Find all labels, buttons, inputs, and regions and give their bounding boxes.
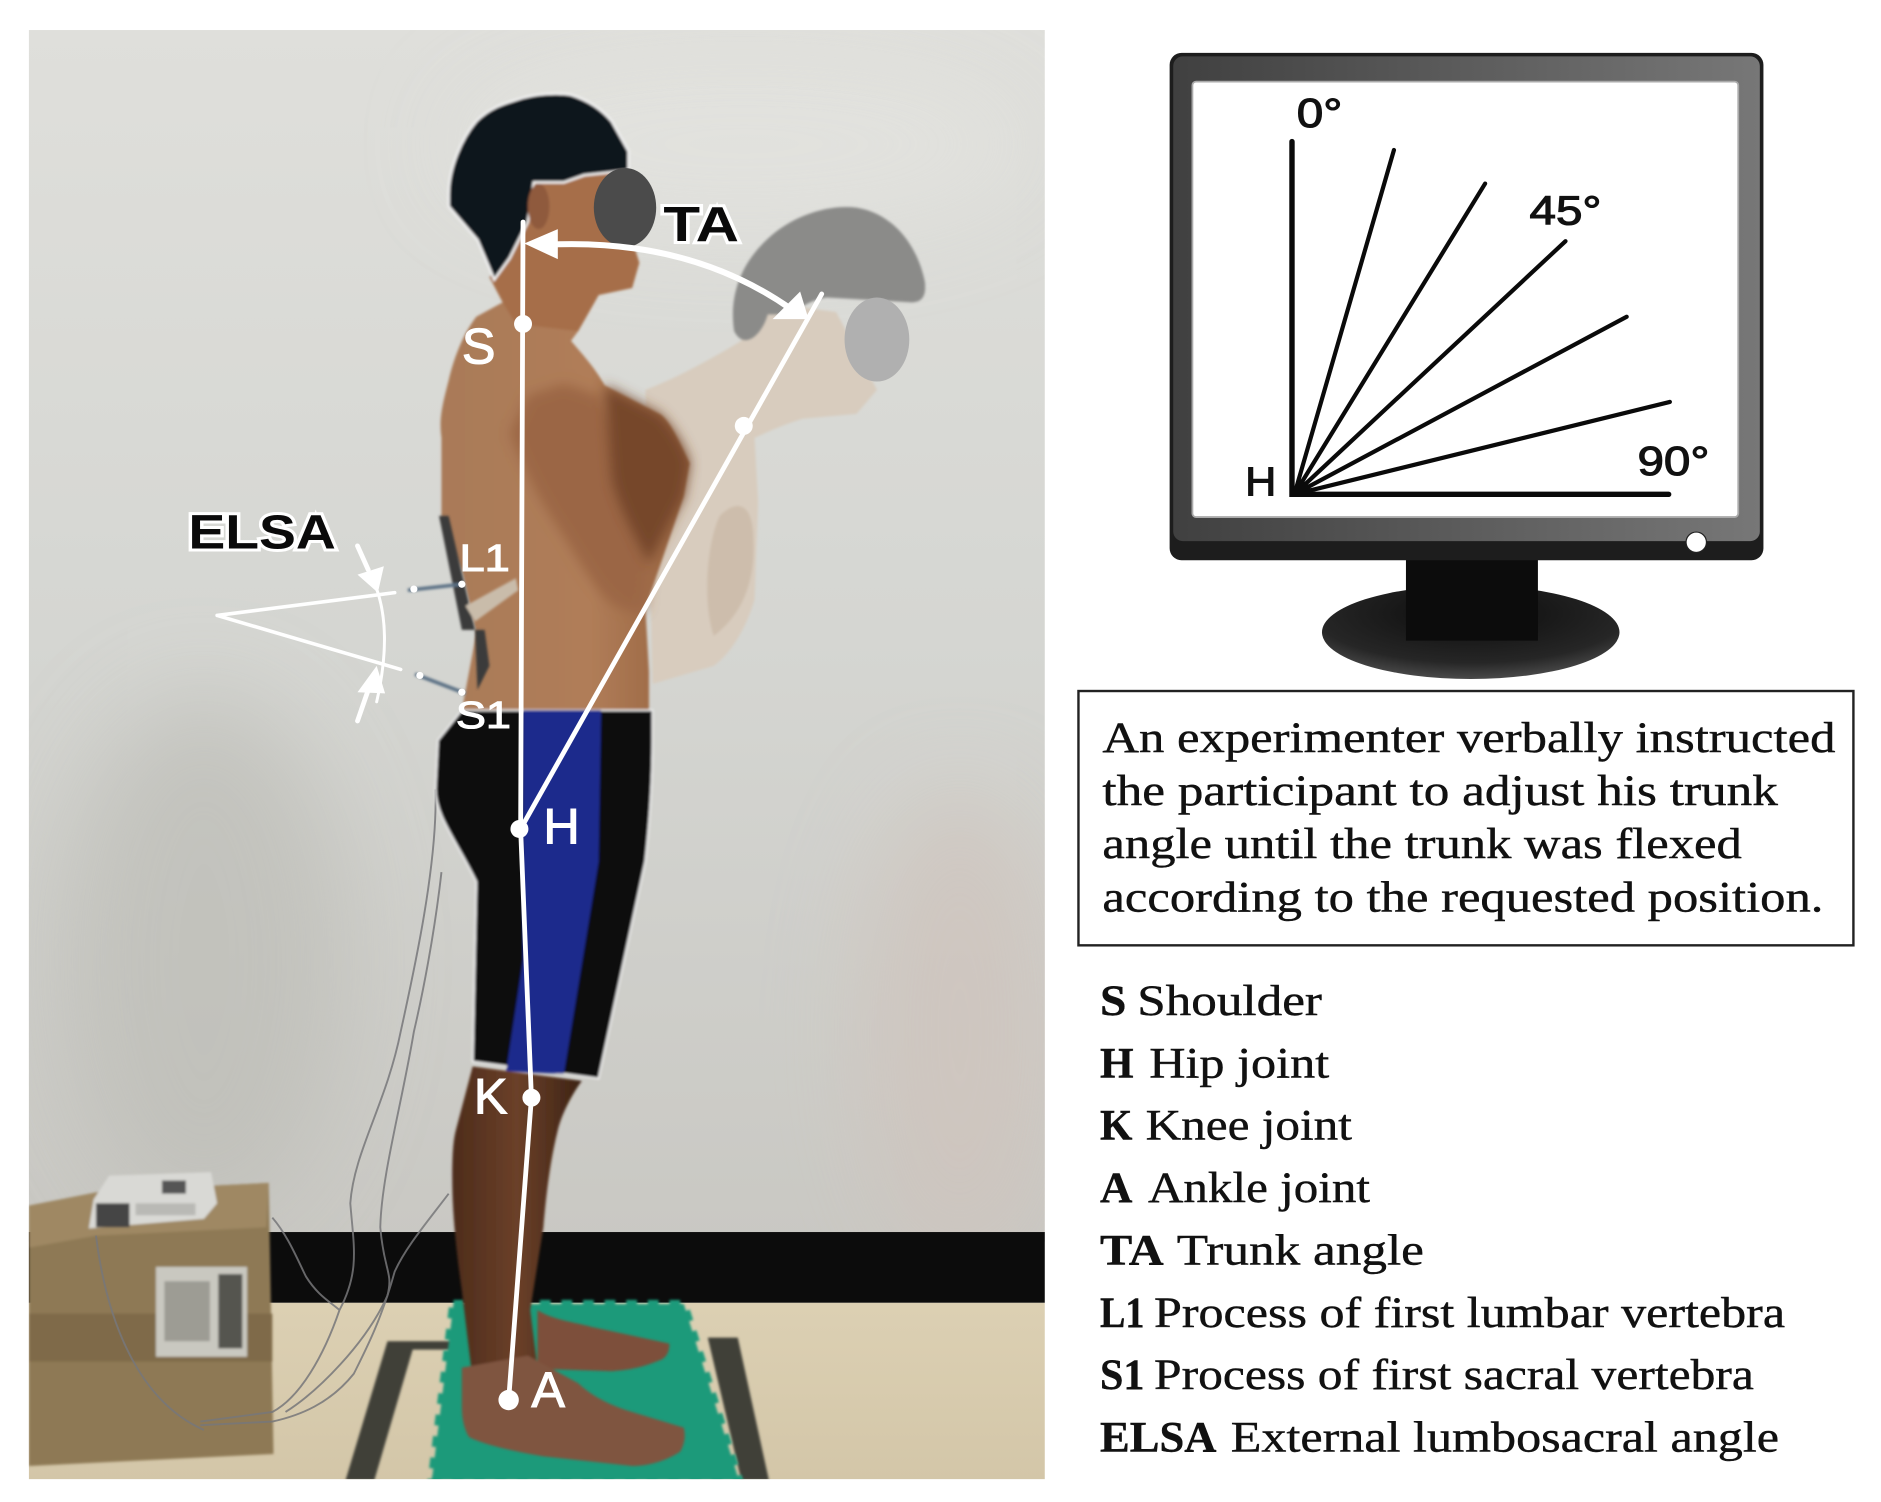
panel: photograph of participant — [29, 30, 1056, 1483]
hands — [605, 385, 690, 564]
legend of abbreviations: A — [1100, 1165, 1132, 1212]
cardboard box — [29, 1172, 274, 1466]
body segment lines — [509, 222, 822, 1400]
instruction text box: angle until the trunk was flexed — [1102, 821, 1742, 868]
label: K: K — [474, 1067, 508, 1124]
legs — [452, 1066, 582, 1410]
legend of abbreviations: Ankle joint — [1148, 1165, 1370, 1212]
legend of abbreviations: L1 — [1100, 1290, 1144, 1337]
floor rails — [345, 1338, 769, 1480]
label: S1: S1 — [456, 694, 511, 737]
label: ELSA: ELSA — [188, 506, 336, 559]
legend of abbreviations: Trunk angle — [1177, 1227, 1424, 1274]
legend of abbreviations: S — [1100, 978, 1126, 1025]
legend of abbreviations: External lumbosacral angle — [1231, 1415, 1779, 1462]
label: H: H — [1245, 458, 1276, 504]
angle lines chart — [1292, 142, 1670, 494]
blue stripe — [506, 710, 601, 1074]
monitor screen — [1192, 82, 1738, 517]
instruction text box: the participant to adjust his trunk — [1102, 768, 1778, 815]
legend of abbreviations: TA — [1100, 1227, 1164, 1274]
label: 90 degrees: 90° — [1637, 438, 1709, 484]
instruction text box: according to the requested position. — [1102, 875, 1823, 922]
label: TA: TA — [663, 197, 739, 252]
signal device — [89, 1172, 217, 1228]
instruction text box — [1078, 691, 1853, 945]
ear — [528, 184, 549, 229]
power button — [1686, 532, 1706, 552]
legend of abbreviations: Shoulder — [1137, 978, 1322, 1025]
face and neck — [489, 168, 639, 331]
legend of abbreviations: S1 — [1100, 1352, 1144, 1399]
rear foot — [537, 1310, 669, 1371]
legend of abbreviations: Hip joint — [1149, 1040, 1329, 1087]
icon: computer monitor with angle display — [1170, 53, 1763, 679]
legend of abbreviations: H — [1100, 1040, 1134, 1087]
legend of abbreviations — [1100, 978, 1785, 1462]
ELSA arrows — [357, 546, 368, 721]
legend of abbreviations: Process of first lumbar vertebra — [1154, 1290, 1785, 1337]
label: H: H — [543, 797, 580, 854]
label: 45 degrees: 45° — [1530, 187, 1601, 233]
label: A: A — [531, 1361, 565, 1418]
ghost figure: flexed trunk — [645, 207, 925, 684]
ELSA angle annotation — [217, 546, 465, 721]
instruction text box: An experimenter verbally instructed — [1102, 715, 1836, 762]
legend of abbreviations: Process of first sacral vertebra — [1154, 1352, 1754, 1399]
legend of abbreviations: Knee joint — [1146, 1103, 1352, 1150]
label: S: S — [462, 318, 495, 375]
legend of abbreviations: K — [1100, 1103, 1133, 1150]
lumbar sensor strap — [408, 516, 518, 693]
sensor wires — [96, 789, 449, 1430]
front foot — [462, 1356, 685, 1466]
baseboard — [29, 1232, 1045, 1303]
joint markers — [498, 315, 753, 1410]
hair — [449, 94, 629, 280]
ghost hair — [733, 207, 925, 340]
shipping label — [156, 1267, 247, 1357]
folded arm — [510, 384, 649, 611]
shorts — [435, 710, 653, 1078]
ghost hands — [707, 506, 754, 636]
floor — [29, 1303, 1045, 1483]
trunk angle arc arrow — [524, 229, 809, 319]
green foam mat — [432, 1304, 739, 1480]
ghost torso — [645, 300, 877, 684]
label: 0 degrees: 0° — [1297, 90, 1342, 136]
participant — [435, 94, 690, 1466]
wall background — [29, 30, 1056, 1272]
monitor stand — [1322, 554, 1619, 679]
monitor bezel — [1170, 53, 1763, 560]
torso — [441, 276, 690, 710]
ghost face mask — [845, 298, 909, 382]
legend of abbreviations: ELSA — [1100, 1415, 1216, 1462]
face mask — [594, 168, 656, 247]
label: L1: L1 — [459, 537, 510, 580]
